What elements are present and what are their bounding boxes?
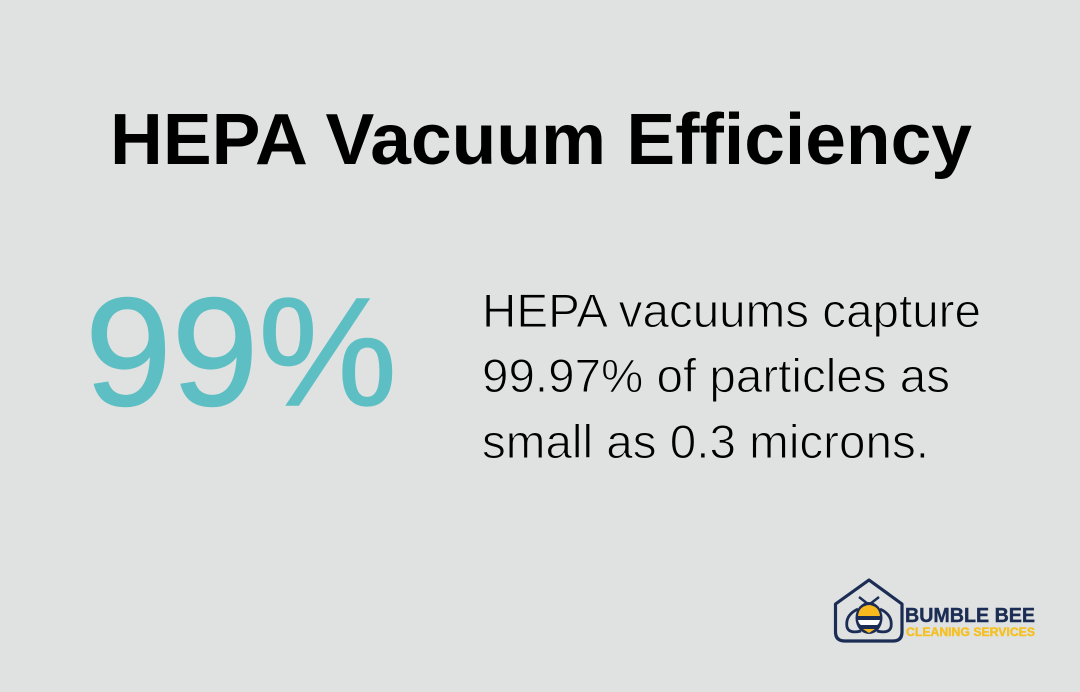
description text [482,284,981,468]
description text: 99.97% of particles as [482,349,950,402]
description text: HEPA vacuums capture [482,284,981,337]
logo wordmark: BUMBLE BEE [905,605,1035,627]
icon: house outline [836,580,902,641]
title: HEPA Vacuum Efficiency [110,100,972,180]
big stat: 99%: 99% [85,266,397,438]
logo: Bumble Bee Cleaning Services [836,580,1035,641]
icon: bee [847,597,891,634]
logo tagline: CLEANING SERVICES [906,627,1035,639]
description text: small as 0.3 microns. [482,415,929,468]
